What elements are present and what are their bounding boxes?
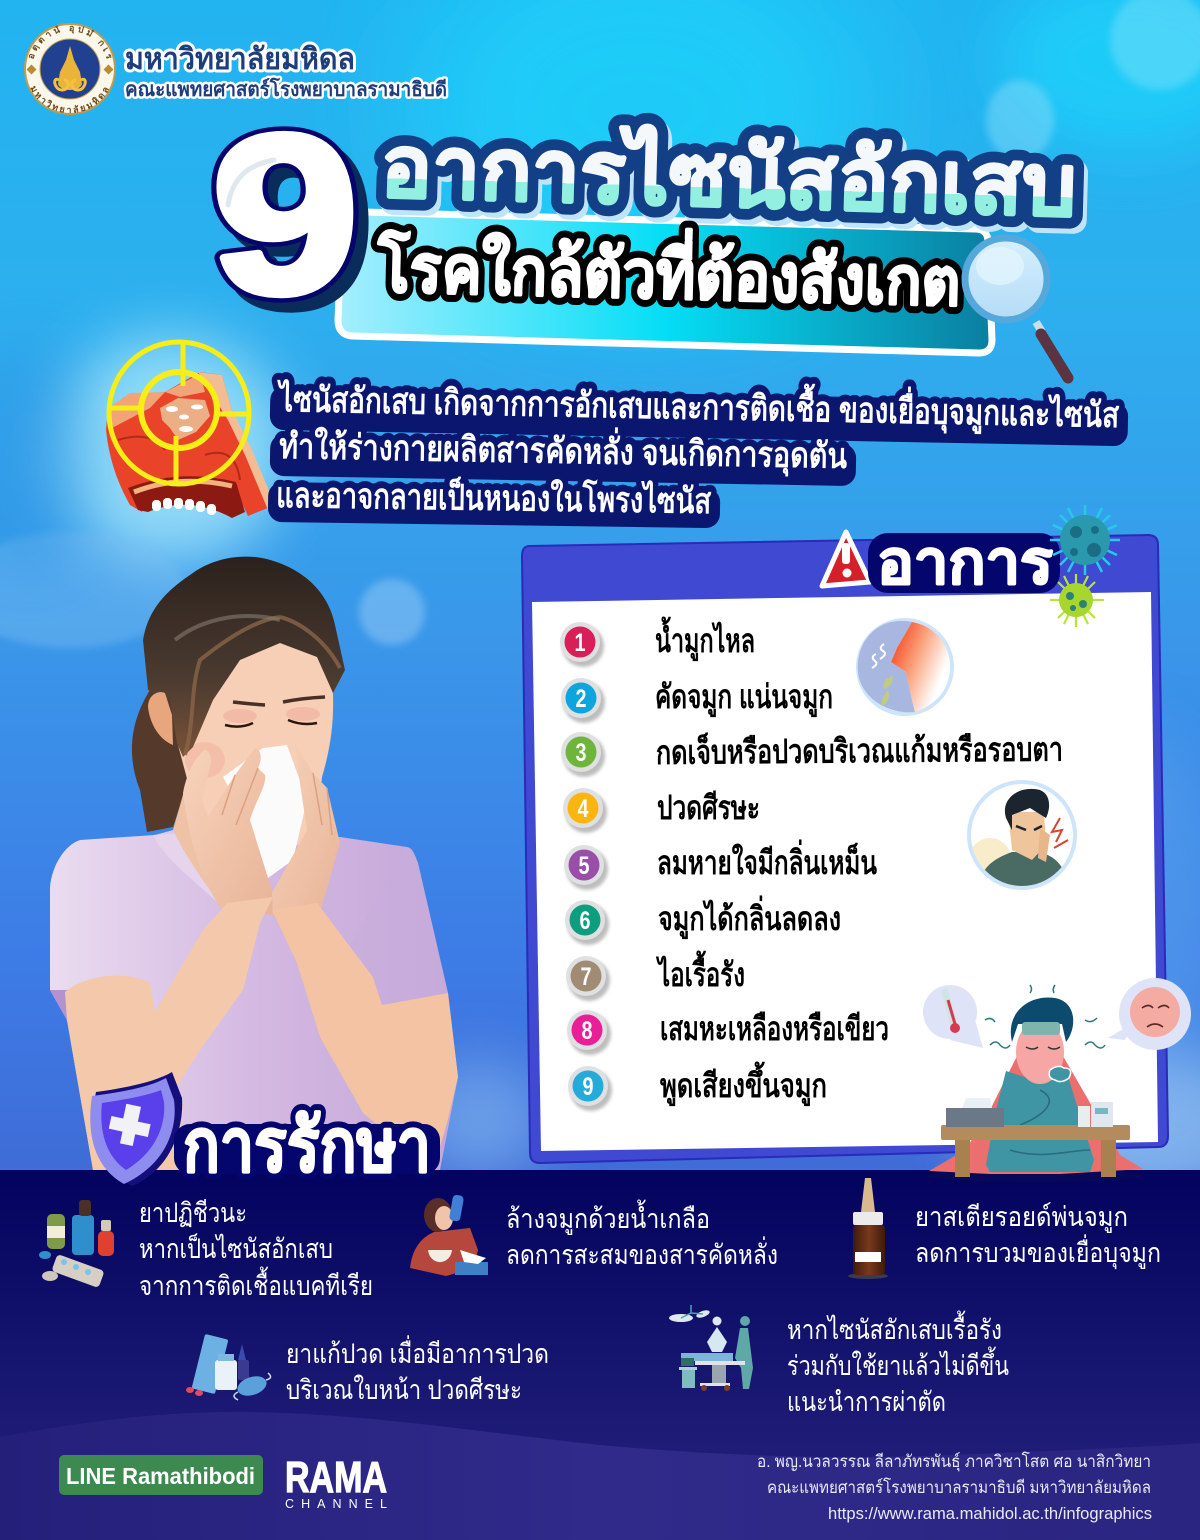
treatment: antibiotics text: ยาปฏิชีวนะ: [139, 1198, 247, 1228]
title number 9: 9: [222, 98, 368, 350]
list: numbered badges: 4: [578, 795, 589, 823]
heading: symptoms: อาการ: [877, 529, 1053, 596]
treatment: painkiller text: [286, 1335, 549, 1405]
list: symptom text: พูดเสียงขึ้นจมูก: [660, 1061, 827, 1107]
icon: sinus anatomy with target: [106, 342, 275, 518]
list: numbered badges: 1: [574, 629, 586, 657]
treatment: antibiotics text: จากการติดเชื้อแบคทีเรีย: [139, 1266, 373, 1301]
text block: intro: [268, 373, 1128, 528]
heading: university name: มหาวิทยาลัยมหิดล: [125, 43, 355, 76]
title line 2: โรคใกล้ตัวที่ต้องสังเกต: [376, 220, 962, 320]
treatment: surgery text: แนะนำการผ่าตัด: [787, 1387, 946, 1417]
treatment: nasal wash text: ล้างจมูกด้วยน้ำเกลือ: [506, 1199, 710, 1235]
icon: magnifying glass: [965, 238, 1068, 378]
treatment: painkiller text: บริเวณใบหน้า ปวดศีรษะ: [286, 1374, 522, 1405]
icon: man with facial pain: [968, 782, 1075, 890]
logo: Mahidol University seal: [24, 23, 116, 115]
icon: virus cyan: [1050, 505, 1120, 575]
logo: Mahidol University seal: อตฺตานํ อุปมํ กเร: [28, 26, 112, 59]
list: symptom text: จมูกได้กลิ่นลดลง: [658, 895, 841, 940]
panel: symptoms: [522, 505, 1191, 1182]
icon: shield: [90, 1072, 182, 1186]
footer credits: คณะแพทยศาสตร์โรงพยาบาลรามาธิบดี มหาวิทยาลัยมหิดล: [767, 1477, 1151, 1497]
logo: Mahidol University seal: มหาวิทยาลัยมหิดล: [30, 86, 110, 114]
treatment: nasal wash icon: [410, 1194, 488, 1276]
treatment: nasal spray text: ลดการบวมของเยื่อบุจมูก: [915, 1234, 1161, 1270]
treatment: antibiotics text: หากเป็นไซนัสอักเสบ: [139, 1231, 333, 1264]
list: numbered badges: 7: [580, 963, 592, 991]
treatment: painkiller text: ยาแก้ปวด เมื่อมีอาการปวด: [286, 1335, 549, 1369]
footer credits: อ. พญ.นวลวรรณ ลีลาภัทรพันธุ์ ภาควิชาโสต ศอ นาสิกวิทยา: [757, 1451, 1151, 1472]
treatment: nasal wash text: [506, 1199, 778, 1270]
icon: sick man at table: [923, 978, 1191, 1182]
text block: intro: ทำให้ร่างกายผลิตสารคัดหลั่ง จนเกิดการอุดตัน: [279, 421, 848, 478]
list: symptom text: ปวดศีรษะ: [657, 789, 760, 826]
text block: intro: และอาจกลายเป็นหนองในโพรงไซนัส: [276, 473, 712, 521]
heading: university name: คณะแพทยศาสตร์โรงพยาบาลรามาธิบดี: [125, 77, 447, 101]
icon: virus lime: [1050, 574, 1104, 627]
list: symptom text: กดเจ็บหรือปวดบริเวณแก้มหรือรอบตา: [656, 728, 1063, 771]
list: numbered badges: 5: [578, 852, 590, 880]
title line 1: อาการไซนัสอักเสบ: [379, 117, 1078, 234]
list: numbered badges: 2: [576, 685, 586, 713]
list: numbered badges: 6: [580, 907, 590, 935]
treatment: surgery text: [787, 1310, 1009, 1417]
list: symptom text: ลมหายใจมีกลิ่นเหม็น: [657, 839, 877, 881]
title line 1: อาการไซนัสอักเสบ: [379, 117, 1078, 234]
treatment: nasal spray text: ยาสเตียรอยด์พ่นจมูก: [915, 1201, 1128, 1233]
treatment: surgery text: ร่วมกับใช้ยาแล้วไม่ดีขึ้น: [787, 1346, 1009, 1381]
treatment: antibiotics icon: [39, 1200, 114, 1288]
list: symptom text: เสมหะเหลืองหรือเขียว: [660, 1010, 889, 1047]
treatment: antibiotics text: [139, 1198, 373, 1301]
treatment: surgery icon: [669, 1305, 753, 1391]
treatment: nasal spray icon: [848, 1178, 888, 1279]
list: numbered badges: 3: [576, 739, 586, 767]
list: symptom text: คัดจมูก แน่นจมูก: [655, 678, 833, 718]
list: symptom text: น้ำมูกไหล: [655, 616, 755, 662]
icon: runny nose: [858, 620, 952, 714]
title line 2: โรคใกล้ตัวที่ต้องสังเกต: [376, 220, 962, 320]
heading: treatment: การรักษา: [183, 1104, 431, 1187]
title number 9: 9: [212, 88, 358, 340]
list: numbered badges: 9: [582, 1073, 594, 1101]
treatment: nasal spray text: [915, 1201, 1161, 1270]
title line 1: อาการไซนัสอักเสบ: [383, 122, 1082, 240]
list: symptom text: [655, 616, 1063, 1107]
RAMA Channel logo: CHANNEL: [285, 1497, 387, 1511]
heading: treatment: การรักษา: [183, 1104, 431, 1187]
bottom band: [0, 1170, 1200, 1540]
title number 9: 9: [212, 88, 358, 340]
footer credits: https://www.rama.mahidol.ac.th/infographics: [828, 1504, 1152, 1523]
treatment: nasal wash text: ลดการสะสมของสารคัดหลั่ง: [506, 1236, 778, 1270]
LINE Ramathibodi badge: LINE Ramathibodi: [66, 1463, 255, 1489]
title banner: [338, 212, 992, 353]
RAMA Channel logo: [285, 1453, 387, 1511]
photo: woman blowing nose: [50, 557, 458, 1170]
RAMA Channel logo: RAMA: [285, 1453, 387, 1502]
list: symptom text: ไอเรื้อรัง: [656, 950, 745, 993]
footer credits: [757, 1451, 1152, 1523]
heading: university name: [125, 43, 447, 101]
treatment: painkiller icon: [186, 1334, 271, 1400]
treatment: surgery text: หากไซนัสอักเสบเรื้อรัง: [787, 1310, 1002, 1345]
LINE Ramathibodi badge: [59, 1455, 263, 1495]
list: numbered badges: 8: [582, 1017, 593, 1045]
list: numbered badges: [560, 622, 612, 1111]
